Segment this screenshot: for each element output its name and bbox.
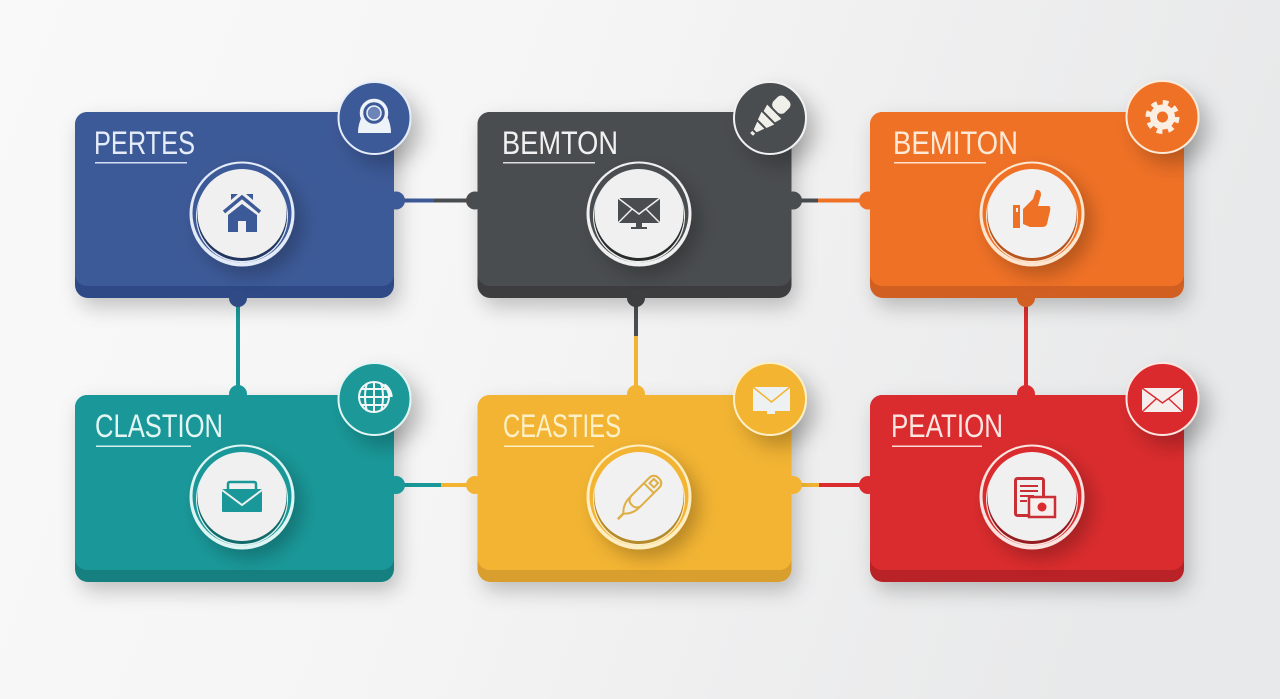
panel: PEATION xyxy=(859,363,1198,582)
connector: yellow to red xyxy=(790,483,865,487)
heading: BEMITON: BEMITON xyxy=(893,125,1018,161)
badge with marker icon xyxy=(734,82,806,154)
heading: CLASTION: CLASTION xyxy=(95,408,223,444)
panel: CEASTIES xyxy=(466,363,806,582)
badge with gear icon xyxy=(1126,81,1198,153)
main disc with pen icon xyxy=(586,444,692,550)
icon: marker xyxy=(745,92,794,141)
icon: thumbs up xyxy=(1013,190,1050,228)
underline xyxy=(503,162,595,164)
connector: blue to teal xyxy=(236,298,240,390)
connector: teal to yellow xyxy=(396,483,471,487)
main disc with document icon xyxy=(980,444,1084,550)
badge with webcam icon xyxy=(338,82,410,154)
heading: PERTES: PERTES xyxy=(94,125,195,161)
heading: PEATION: PEATION xyxy=(891,408,1003,444)
badge with envelope icon xyxy=(1126,363,1198,435)
icon: envelope xyxy=(1142,388,1183,412)
panel: CLASTION xyxy=(75,363,410,582)
icon: gear xyxy=(1149,104,1176,130)
connector: orange to red xyxy=(1024,298,1028,390)
main disc with briefcase icon xyxy=(190,444,294,550)
underline xyxy=(96,446,191,447)
icon: envelope xyxy=(753,387,790,414)
underline xyxy=(504,446,594,447)
icon: envelope briefcase xyxy=(222,482,262,512)
panel: PERTES xyxy=(75,82,410,307)
underline xyxy=(95,162,187,164)
icon: house xyxy=(224,194,260,232)
icon: globe xyxy=(359,382,391,412)
connector: dark to yellow xyxy=(634,298,638,390)
icon: envelope on monitor xyxy=(618,198,660,229)
main disc with envelope icon xyxy=(586,162,692,266)
badge with globe icon xyxy=(338,363,410,435)
panel: BEMTON xyxy=(466,82,806,307)
connector: blue to dark xyxy=(396,198,470,202)
panel: BEMITON xyxy=(859,81,1198,307)
connector: dark to orange xyxy=(790,198,864,202)
underline xyxy=(894,162,986,164)
icon: document and card xyxy=(1016,478,1055,517)
icon: webcam xyxy=(358,100,391,133)
main disc with house icon xyxy=(190,162,294,266)
heading: CEASTIES: CEASTIES xyxy=(503,408,621,444)
badge with envelope icon xyxy=(734,363,806,435)
main disc with thumbs-up icon xyxy=(980,162,1084,266)
heading: BEMTON: BEMTON xyxy=(502,125,618,161)
underline xyxy=(892,446,982,447)
icon: pen xyxy=(613,473,664,524)
